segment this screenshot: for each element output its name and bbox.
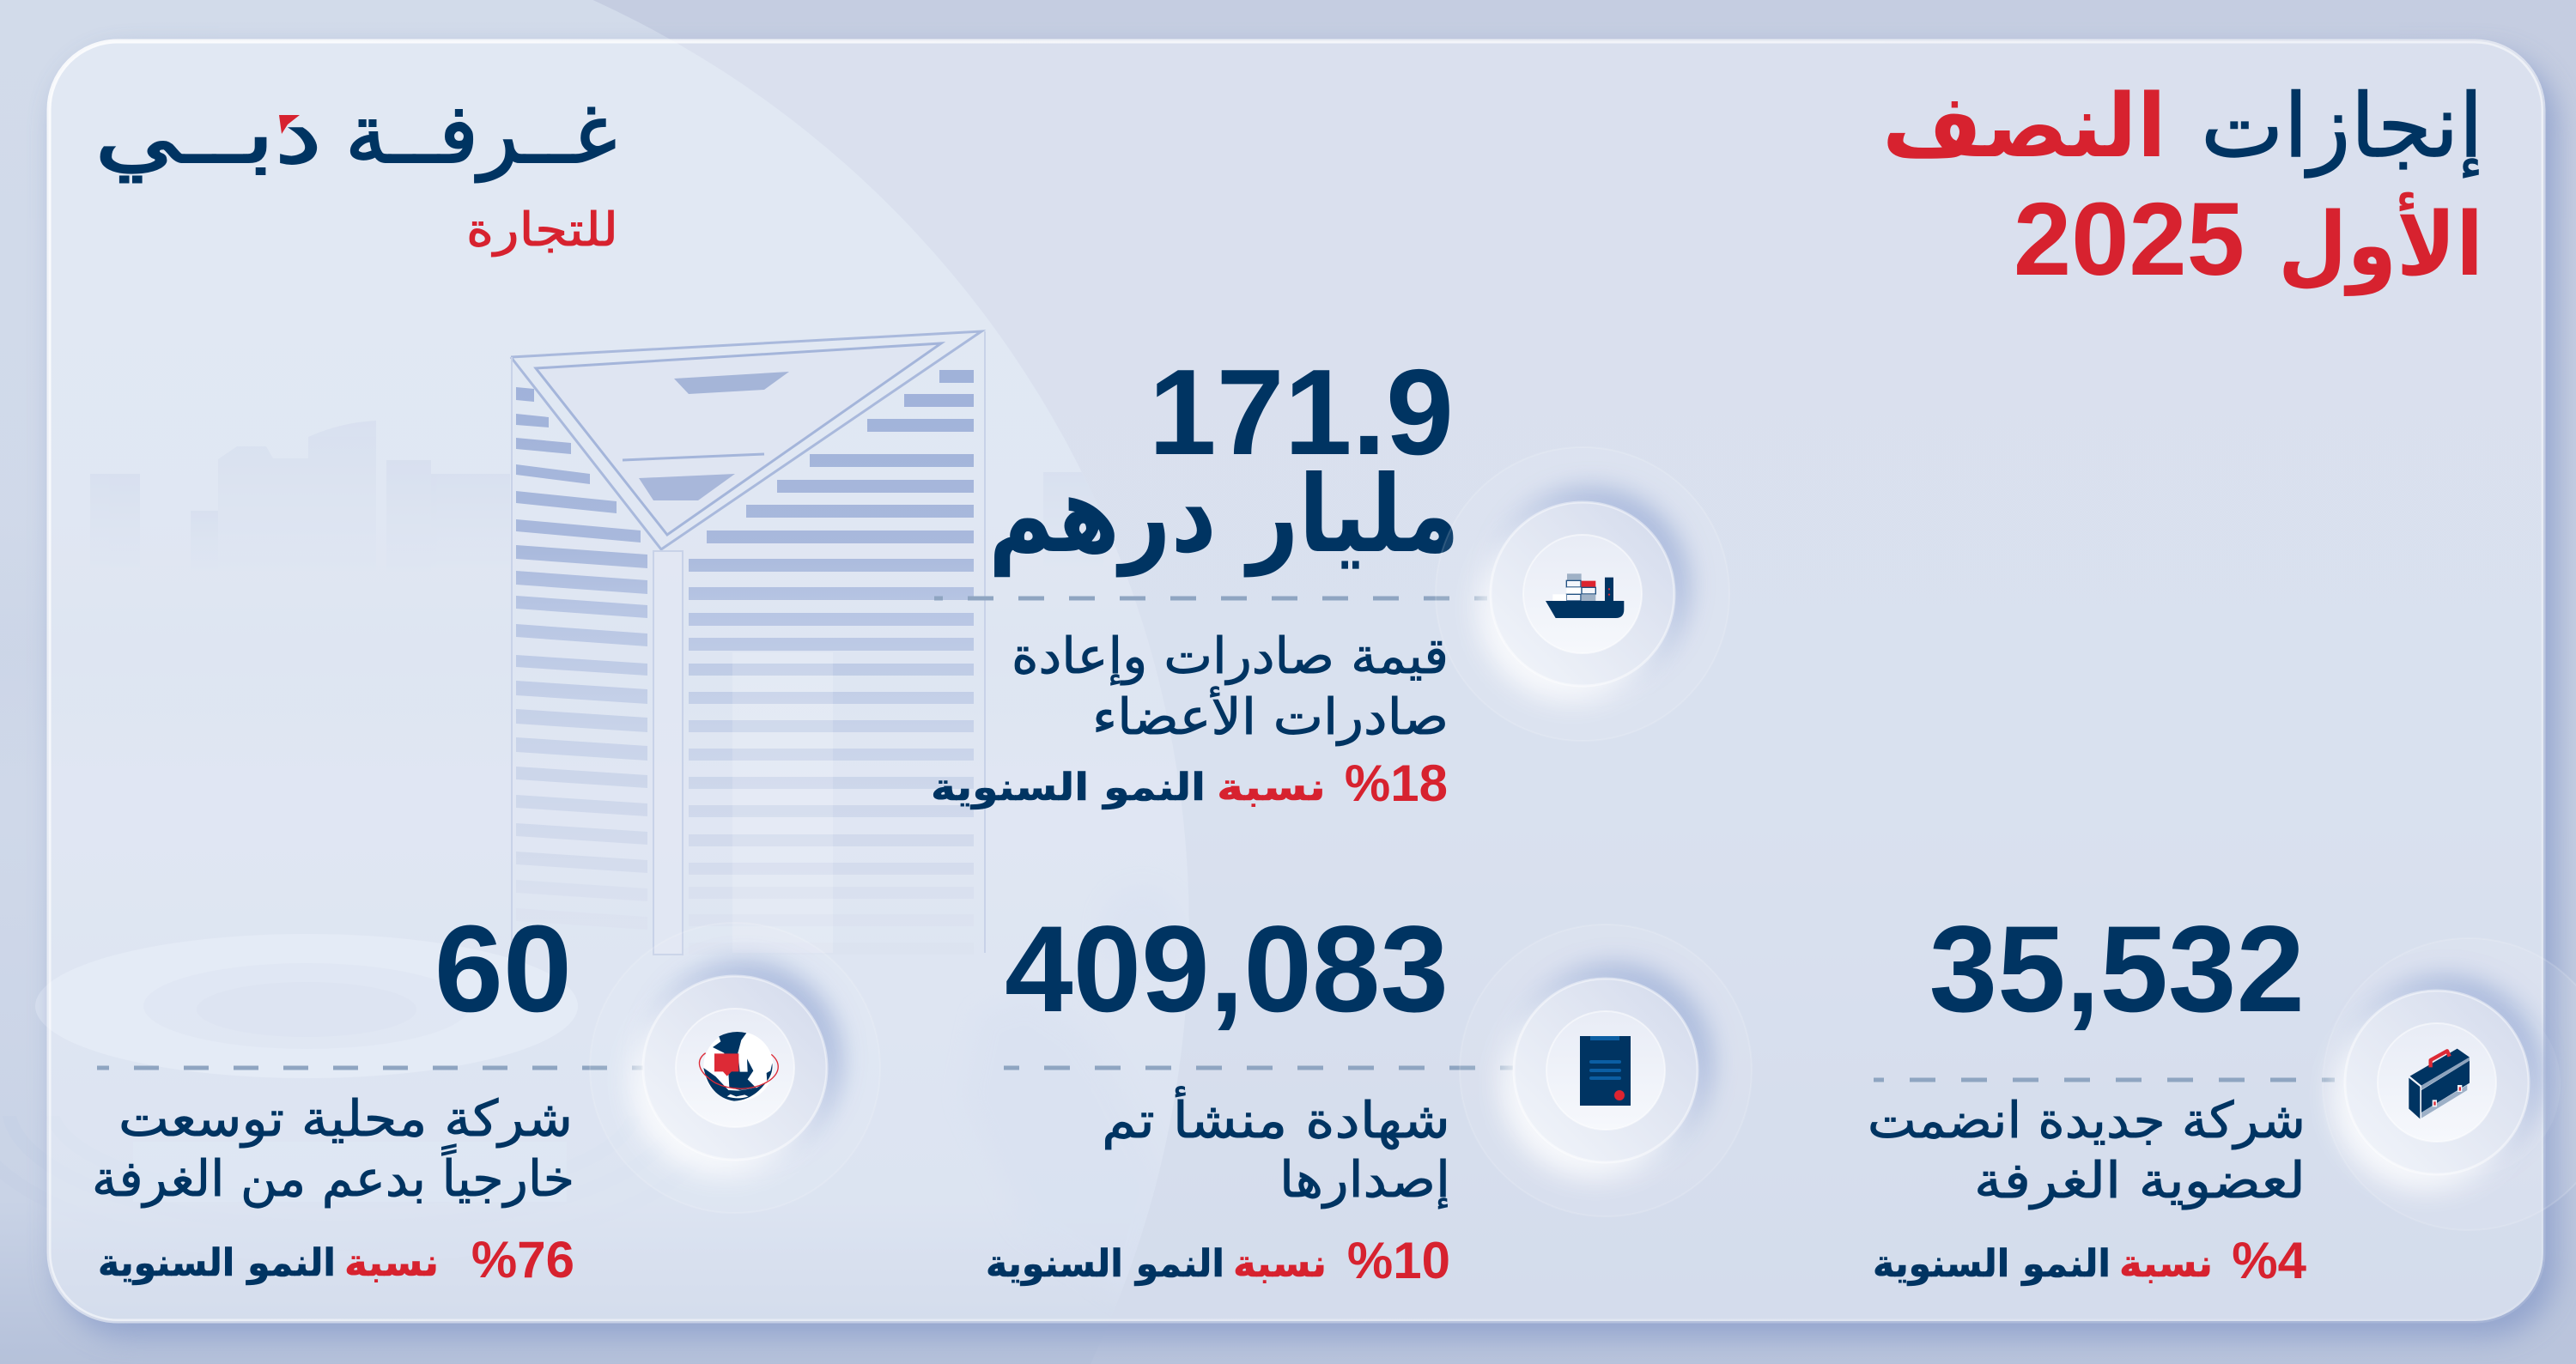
icon: certificate document <box>1460 924 1752 1216</box>
title: 2025 <box>2014 180 2245 297</box>
stat: certificates of origin <box>986 901 1513 1289</box>
logo: Dubai Chamber of Commerce <box>94 86 618 257</box>
stat: exports value: %18 <box>1345 755 1448 812</box>
title <box>1882 76 2483 297</box>
title: إنجازات <box>2201 76 2483 178</box>
logo: Dubai Chamber of Commerce: للتجارة <box>466 203 618 257</box>
palm trees <box>962 888 1182 1305</box>
stat: exports value: النمو السنوية <box>931 766 1206 809</box>
stat: new member companies <box>1868 901 2335 1289</box>
stat: exports value: صادرات الأعضاء <box>1092 686 1449 746</box>
stat: exports value: مليار درهم <box>988 453 1460 578</box>
icon: cargo ship <box>1436 447 1729 741</box>
stat: certificates of origin: النمو السنوية <box>986 1242 1224 1286</box>
stat: exports value: نسبة <box>1217 766 1326 809</box>
stat: certificates of origin: شهادة منشأ تم <box>1102 1086 1450 1149</box>
stat: new member companies: %4 <box>2232 1232 2307 1289</box>
stat: local companies expanded abroad: 60 <box>434 900 572 1038</box>
stat: certificates of origin: إصدارها <box>1279 1150 1450 1209</box>
logo: Dubai Chamber of Commerce: غــرفــة <box>345 86 617 183</box>
stat: local companies expanded abroad <box>92 900 644 1288</box>
stat: certificates of origin: %10 <box>1347 1232 1450 1289</box>
stat: local companies expanded abroad: %76 <box>471 1231 574 1288</box>
icon: globe <box>590 923 880 1213</box>
stat: exports value: 171.9 <box>1149 344 1454 481</box>
stat: local companies expanded abroad: شركة محلية توسعت <box>118 1089 573 1149</box>
icon: briefcase <box>2322 958 2576 1210</box>
logo: Dubai Chamber of Commerce: دبــي <box>94 86 322 183</box>
stat: local companies expanded abroad: نسبة <box>344 1241 439 1285</box>
title: الأول <box>2278 191 2483 296</box>
stat: new member companies: لعضوية الغرفة <box>1974 1151 2306 1210</box>
title: النصف <box>1882 76 2166 178</box>
stat: new member companies: 35,532 <box>1929 901 2305 1038</box>
stat: local companies expanded abroad: خارجياً بدعم من الغرفة <box>92 1143 574 1209</box>
tower <box>511 331 985 955</box>
stat: exports value: قيمة صادرات وإعادة <box>1012 627 1449 686</box>
stat: new member companies: النمو السنوية <box>1873 1242 2111 1286</box>
stat: exports value <box>931 344 1487 812</box>
stat: local companies expanded abroad: النمو السنوية <box>98 1241 336 1285</box>
background photo: skyline, water and stadium <box>0 421 1202 1305</box>
stadium <box>0 934 721 1258</box>
stat: certificates of origin: نسبة <box>1233 1242 1327 1286</box>
stat: new member companies: شركة جديدة انضمت <box>1868 1091 2306 1150</box>
stat: certificates of origin: 409,083 <box>1005 901 1449 1038</box>
stat: new member companies: نسبة <box>2119 1242 2213 1286</box>
